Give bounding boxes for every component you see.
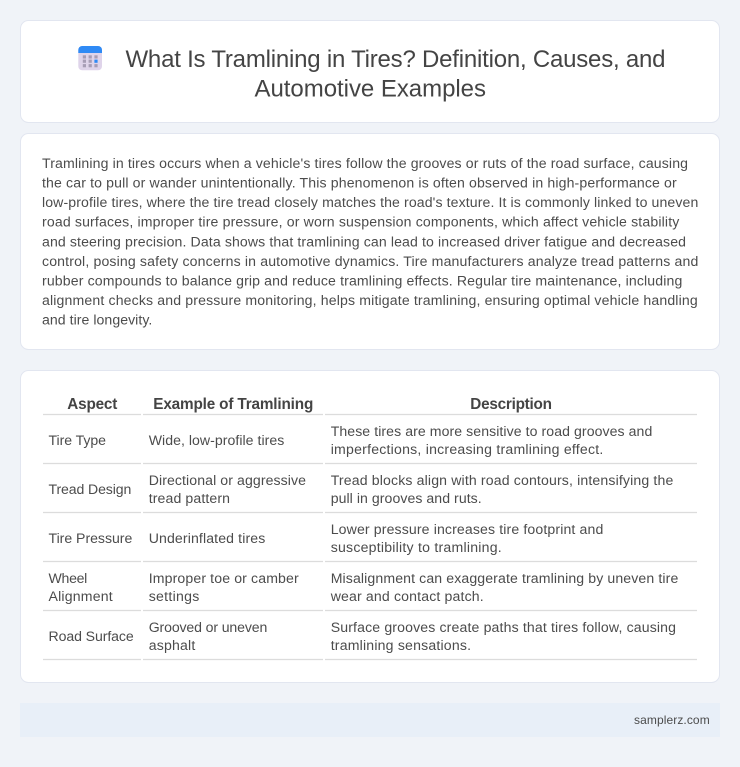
table row: tread design: Tread Design [48, 481, 131, 497]
table row: tire type: imperfections, increasing tramlining effect. [331, 441, 603, 457]
table row: wheel alignment [43, 570, 697, 610]
footer credit: samplerz.com [634, 713, 710, 727]
footer [20, 703, 720, 737]
table row: tire type [43, 423, 697, 464]
table row: wheel alignment: wear and contact patch. [330, 588, 484, 604]
title: What Is Tramlining in Tires? Definition, Causes, and [126, 46, 666, 73]
text block: definition: road surfaces, improper tire pressure, or worn suspension components, which affect vehicle stability [42, 214, 680, 230]
title [126, 46, 666, 102]
table row: tire pressure: Tire Pressure [48, 530, 132, 546]
table row: tread design: Directional or aggressive [149, 472, 306, 488]
table row: road surface: Grooved or uneven [149, 619, 267, 635]
table row: road surface: asphalt [149, 637, 195, 653]
table row: road surface: Surface grooves create paths that tires follow, causing [331, 619, 676, 635]
table row: tread design: pull in grooves and ruts. [331, 490, 482, 506]
table header row [43, 396, 697, 414]
table row: road surface: tramlining sensations. [331, 637, 471, 653]
text block: definition: Tramlining in tires occurs when a vehicle's tires follow the grooves or ruts of the road surface, causing [42, 155, 688, 171]
table row: tire type: These tires are more sensitive to road grooves and [331, 423, 652, 439]
table row: tire pressure: Underinflated tires [149, 530, 265, 546]
table row: wheel alignment: Improper toe or camber [149, 570, 299, 586]
table row: wheel alignment: Wheel [48, 570, 87, 586]
panel: definition paragraph [20, 134, 720, 350]
text block: definition [42, 155, 698, 328]
table row: tire pressure: susceptibility to tramlining. [331, 539, 502, 555]
table row: road surface: Road Surface [48, 628, 134, 644]
table row: tread design: Tread blocks align with road contours, intensifying the [331, 472, 673, 488]
text block: definition: rubber compounds to balance grip and reduce tramlining effects. Regular tire maintenance, including [42, 272, 682, 288]
table row: tread design: tread pattern [149, 490, 230, 506]
panel: table [20, 370, 720, 682]
text block: definition: the car to pull or wander unintentionally. This phenomenon is often observed in high-performance or [42, 174, 677, 190]
table header row: Aspect [67, 396, 117, 413]
table row: road surface [43, 619, 697, 660]
table row: wheel alignment: Misalignment can exaggerate tramlining by uneven tire [331, 570, 678, 586]
text block: definition: and steering precision. Data shows that tramlining can lead to increased driver fatigue and decreased [42, 233, 686, 249]
table header row: Description [470, 396, 552, 413]
table row: tire type: Wide, low-profile tires [149, 432, 284, 448]
text block: definition: low-profile tires, where the tire tread closely matches the road's texture. It is commonly linked to uneven [42, 194, 698, 210]
table row: wheel alignment: settings [149, 588, 199, 604]
panel: title header [20, 20, 720, 122]
table row: tread design [43, 472, 697, 512]
table row: tire pressure [43, 521, 697, 562]
text block: definition: control, posing safety concerns in automotive dynamics. Tire manufacturers analyze tread patterns and [42, 253, 698, 269]
title: Automotive Examples [254, 76, 486, 102]
table row: tire pressure: Lower pressure increases tire footprint and [331, 521, 603, 537]
text block: definition: alignment checks and pressure monitoring, helps mitigate tramlining, ensuring optimal vehicle handling [42, 292, 698, 308]
table header row: Example of Tramlining [153, 396, 313, 413]
table row: tire type: Tire Type [48, 432, 106, 448]
icon: calendar [78, 46, 102, 70]
text block: definition: and tire longevity. [42, 312, 152, 328]
table row: wheel alignment: Alignment [48, 588, 113, 604]
